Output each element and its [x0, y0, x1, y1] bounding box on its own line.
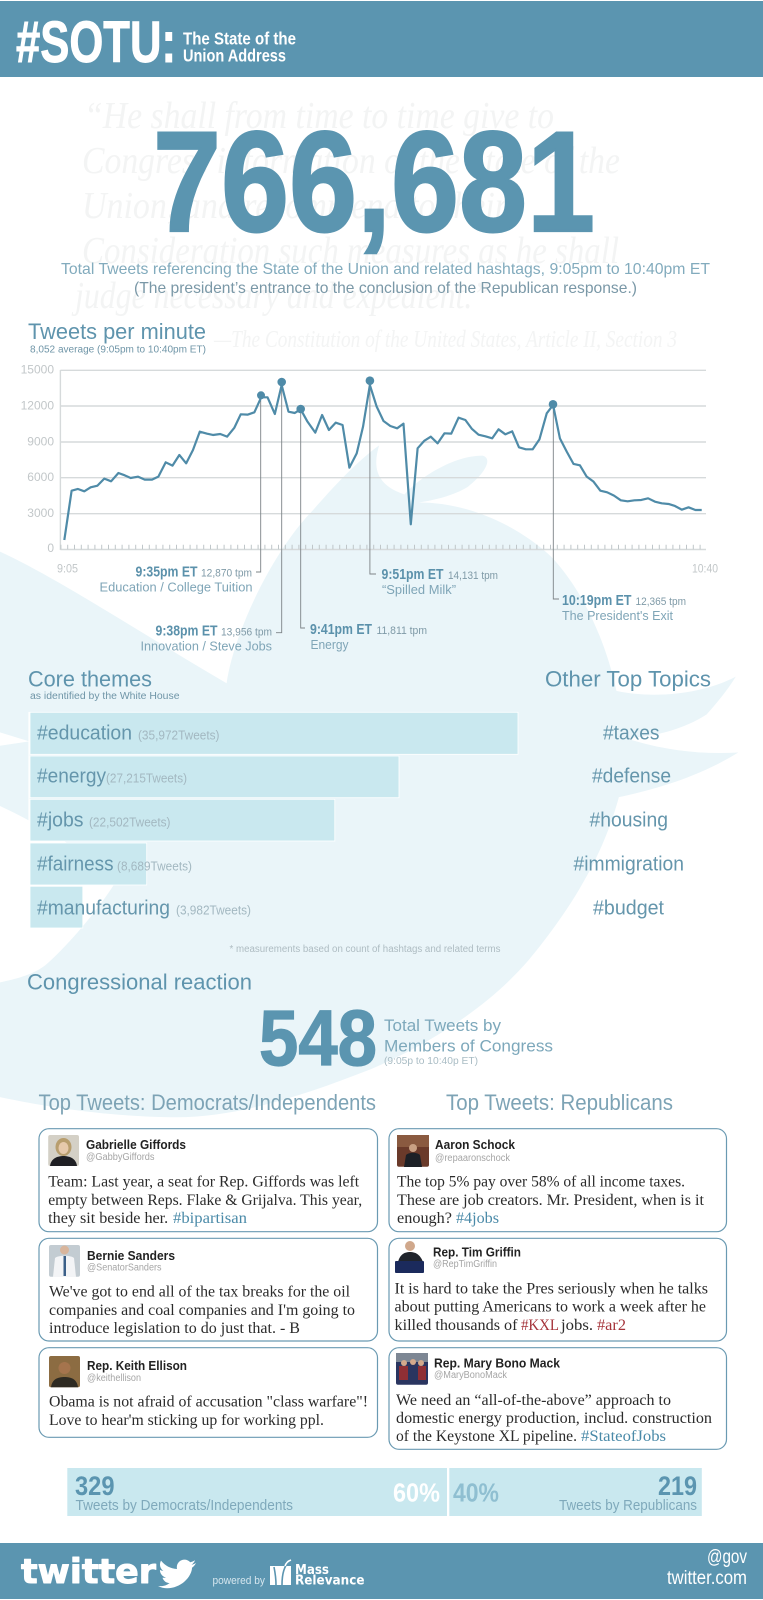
- tweet card: Aaron Schock: The top 5% pay over 58% of all income taxes.: [397, 1174, 685, 1191]
- powered by label: powered by: [212, 1575, 265, 1587]
- tweet card: Mary Bono Mack: #StateofJobs: [581, 1428, 666, 1445]
- header subtitle: [183, 28, 296, 66]
- annotation: 9:35pm: Education / College Tuition: [100, 580, 252, 595]
- tweet card: Gabrielle Giffords: @GabbyGiffords: [86, 1152, 154, 1163]
- tweet card: Bernie Sanders: @SenatorSanders: [87, 1263, 162, 1274]
- header banner: [0, 1, 763, 77]
- split bar: republicans: [449, 1468, 702, 1516]
- bar label: energy: [37, 765, 187, 788]
- heading: top tweets republicans: Top Tweets: Republicans: [446, 1090, 673, 1115]
- tweet card: Gabrielle Giffords: Team: Last year, a seat for Rep. Giffords was left: [48, 1174, 360, 1191]
- tweet card: Tim Griffin: #ar2: [597, 1317, 626, 1334]
- 548 caption: Members of Congress: [384, 1037, 553, 1056]
- total tweets caption: Total Tweets referencing the State of the Union and related hashtags, 9:05pm to 10:40pm ET: [61, 261, 710, 278]
- x axis labels: [57, 562, 718, 576]
- bar label: education: (35,972Tweets): [138, 728, 220, 742]
- tweet card: Bernie Sanders: introduce legislation to do just that. - B: [49, 1320, 300, 1337]
- avatar: Sanders: [49, 1245, 80, 1277]
- constitution quote watermark: [71, 95, 677, 353]
- data line: [64, 385, 702, 540]
- split bar: republicans: 40%: [453, 1478, 499, 1508]
- footer handle: @gov: [707, 1547, 747, 1568]
- other topics list: #immigration: [574, 853, 684, 876]
- total tweets caption: (The president’s entrance to the conclusion of the Republican response.): [134, 280, 637, 297]
- tweet card: Tim Griffin: Rep. Tim Griffin: [433, 1246, 521, 1260]
- other topics list: #taxes: [603, 721, 660, 744]
- heading: top tweets democrats: Top Tweets: Democrats/Independents: [38, 1090, 376, 1115]
- line chart: tweets per minute: [21, 362, 718, 633]
- bar label: manufacturing: #manufacturing: [37, 896, 170, 919]
- tweet card: Gabrielle Giffords: #bipartisan: [173, 1210, 247, 1227]
- tweet card: Mary Bono Mack: @MaryBonoMack: [434, 1370, 508, 1381]
- footer handle: twitter.com: [667, 1568, 747, 1589]
- tweet card: Mary Bono Mack: [389, 1348, 726, 1449]
- tweet card: Aaron Schock: enough?: [397, 1210, 452, 1227]
- 548 caption: [384, 1016, 553, 1067]
- annotation: 10:19pm: The President's Exit: [562, 608, 673, 623]
- tweet card: Mary Bono Mack: We need an “all-of-the-above” approach to: [396, 1392, 671, 1409]
- bar label: jobs: #jobs: [37, 809, 84, 832]
- x axis labels: 9:05: [57, 562, 78, 576]
- split bar: democrats: [67, 1468, 447, 1516]
- tweet card: Tim Griffin: It is hard to take the Pres seriously when he talks: [394, 1280, 708, 1297]
- tweet card: Aaron Schock: #4jobs: [456, 1210, 499, 1227]
- tweet card: Tim Griffin: jobs.: [560, 1317, 593, 1334]
- heading: core themes: as identified by the White House: [30, 691, 180, 702]
- annotation: 9:51pm: “Spilled Milk”: [382, 582, 456, 597]
- tweet card: Tim Griffin: #KXL: [521, 1317, 559, 1334]
- 548 caption: (9:05p to 10:40p ET): [384, 1055, 478, 1067]
- tweet card: Keith Ellison: [39, 1348, 378, 1437]
- tweet card: Keith Ellison: Love to hear'm sticking up for working ppl.: [49, 1412, 324, 1429]
- constitution quote watermark: judge necessary and expedient.”: [71, 275, 490, 317]
- tweet card: Mary Bono Mack: Rep. Mary Bono Mack: [434, 1357, 560, 1371]
- mass relevance wordmark: Relevance: [295, 1574, 365, 1588]
- tweet card: Gabrielle Giffords: [39, 1129, 378, 1232]
- tweet card: Aaron Schock: These are job creators. Mr. President, when is it: [397, 1192, 705, 1209]
- mass relevance wordmark: Mass: [295, 1563, 329, 1578]
- split bar: republicans: 219: [658, 1471, 697, 1501]
- annotation: 9:41pm: 9:41pm ET: [310, 621, 372, 638]
- annotation: 9:41pm: 11,811 tpm: [376, 625, 427, 637]
- annotation: 9:35pm: 9:35pm ET: [136, 564, 198, 581]
- footer banner: [0, 1543, 763, 1599]
- y axis labels: 6000: [27, 470, 54, 484]
- annotation: 9:51pm: 9:51pm ET: [382, 566, 444, 583]
- background: twitter bird silhouette: [0, 445, 738, 1117]
- tweet card: Gabrielle Giffords: empty between Reps. Flake & Grijalva. This year,: [48, 1192, 362, 1209]
- constitution quote watermark: “He shall from time to time give to: [84, 95, 554, 137]
- header subtitle: The State of the: [183, 28, 296, 48]
- bar label: fairness: #fairness: [37, 853, 114, 876]
- constitution quote watermark: Union, and recommend to their: [82, 185, 508, 227]
- y axis labels: 3000: [27, 506, 54, 520]
- avatar: Griffin: [395, 1241, 424, 1273]
- tweet card: Keith Ellison: Rep. Keith Ellison: [87, 1359, 187, 1373]
- bar label: jobs: [37, 809, 170, 832]
- y axis labels: 0: [47, 541, 54, 555]
- bar label: education: #education: [37, 721, 132, 744]
- y axis labels: 9000: [27, 434, 54, 448]
- annotation: 10:19pm: 10:19pm ET: [562, 592, 632, 609]
- constitution quote watermark: Congress information of the State of the: [82, 140, 620, 182]
- annotation: 9:35pm: 12,870 tpm: [201, 568, 252, 580]
- tweet card: Bernie Sanders: [39, 1238, 378, 1341]
- total tweets caption: [61, 261, 710, 297]
- annotation: 9:51pm: 14,131 tpm: [448, 570, 498, 582]
- annotation: 10:19pm: [562, 592, 686, 623]
- avatar: Schock: [397, 1135, 429, 1167]
- twitter wordmark: twitter: [21, 1552, 156, 1592]
- tweet card: Tim Griffin: killed thousands of: [394, 1317, 518, 1334]
- bar label: manufacturing: (3,982Tweets): [176, 903, 251, 917]
- tweet card: Gabrielle Giffords: they sit beside her.: [48, 1210, 168, 1227]
- other topics list: #housing: [590, 809, 668, 832]
- header title: #SOTU:: [16, 10, 176, 75]
- footnote: * measurements based on count of hashtags and related terms: [230, 944, 500, 955]
- annotation: 9:41pm: Energy: [310, 637, 349, 652]
- y axis labels: 12000: [21, 398, 54, 412]
- avatar: Ellison: [49, 1356, 80, 1387]
- header subtitle: Union Address: [183, 46, 286, 66]
- icon: twitter bird: [158, 1560, 196, 1588]
- avatar: Bono Mack: [396, 1353, 428, 1385]
- split bar: democrats: 329: [75, 1471, 114, 1501]
- annotation: 9:38pm: 13,956 tpm: [221, 627, 272, 639]
- tweet card: Aaron Schock: [389, 1129, 726, 1232]
- tweet card: Keith Ellison: @keithellison: [87, 1373, 141, 1384]
- other topics list: #budget: [593, 896, 664, 919]
- x axis labels: 10:40: [692, 562, 718, 576]
- tweet card: Bernie Sanders: We've got to end all of the tax breaks for the oil: [49, 1284, 351, 1301]
- split bar: republicans: Tweets by Republicans: [559, 1497, 697, 1514]
- tweet card: Keith Ellison: Obama is not afraid of accusation "class warfare"!: [49, 1394, 368, 1411]
- heading: tweets per minute: Tweets per minute: [28, 319, 206, 344]
- annotation: 10:19pm: 12,365 tpm: [636, 596, 686, 608]
- tweet card: Bernie Sanders: companies and coal companies and I'm going to: [49, 1302, 355, 1319]
- annotation: 9:38pm: 9:38pm ET: [156, 623, 218, 640]
- bar label: fairness: (8,689Tweets): [117, 860, 192, 874]
- bar label: jobs: (22,502Tweets): [89, 816, 170, 830]
- tweet card: Tim Griffin: @RepTimGriffin: [433, 1259, 497, 1270]
- annotation: 9:41pm: [310, 621, 427, 652]
- tweet card: Bernie Sanders: Bernie Sanders: [87, 1249, 175, 1263]
- bar label: fairness: [37, 853, 192, 876]
- tweet card: Aaron Schock: Aaron Schock: [435, 1138, 515, 1152]
- tweet card: Mary Bono Mack: domestic energy production, includ. construction: [396, 1410, 712, 1427]
- tweet card: Gabrielle Giffords: Gabrielle Giffords: [86, 1138, 186, 1152]
- avatar: Giffords: [48, 1135, 79, 1166]
- y axis labels: [21, 362, 54, 555]
- leader lines: [256, 380, 559, 633]
- heading: tweets per minute: [28, 319, 206, 356]
- constitution quote watermark: Consideration such measures as he shall: [82, 230, 619, 272]
- tweet card: Tim Griffin: about putting Americans to work a week after he: [394, 1299, 706, 1316]
- tweet card: Tim Griffin: [389, 1238, 726, 1341]
- footer handle: [667, 1547, 747, 1589]
- other topics list: [574, 721, 684, 919]
- split bar: democrats: Tweets by Democrats/Independents: [76, 1497, 293, 1514]
- big total number: 766,681: [153, 103, 595, 262]
- 548 caption: Total Tweets by: [384, 1016, 501, 1035]
- icon: mass relevance logo: [270, 1560, 291, 1585]
- annotation: 9:38pm: [140, 623, 272, 654]
- bar label: manufacturing: [37, 896, 251, 919]
- heading: core themes: [28, 667, 180, 702]
- heading: core themes: Core themes: [28, 667, 152, 692]
- annotation: 9:38pm: Innovation / Steve Jobs: [140, 639, 272, 654]
- mass relevance wordmark: [295, 1563, 365, 1588]
- bar chart: core themes: [29, 712, 518, 928]
- bar label: energy: #energy: [37, 765, 107, 788]
- bar label: education: [37, 721, 220, 744]
- split bar: democrats: 60%: [393, 1478, 440, 1508]
- heading: congressional reaction: Congressional reaction: [27, 969, 252, 994]
- bar label: energy: (27,215Tweets): [106, 772, 187, 786]
- peak markers: [257, 376, 557, 413]
- tweet card: Aaron Schock: @repaaronschock: [435, 1153, 511, 1164]
- annotation: 9:51pm: [382, 566, 498, 597]
- big number: 548: 548: [259, 993, 377, 1082]
- other topics list: #defense: [592, 765, 671, 788]
- heading: other top topics: Other Top Topics: [545, 667, 711, 692]
- annotation: 9:35pm: [100, 564, 252, 595]
- y axis labels: 15000: [21, 362, 54, 376]
- tweet card: Mary Bono Mack: of the Keystone XL pipeline.: [396, 1428, 577, 1445]
- heading: tweets per minute: 8,052 average (9:05pm to 10:40pm ET): [30, 345, 206, 356]
